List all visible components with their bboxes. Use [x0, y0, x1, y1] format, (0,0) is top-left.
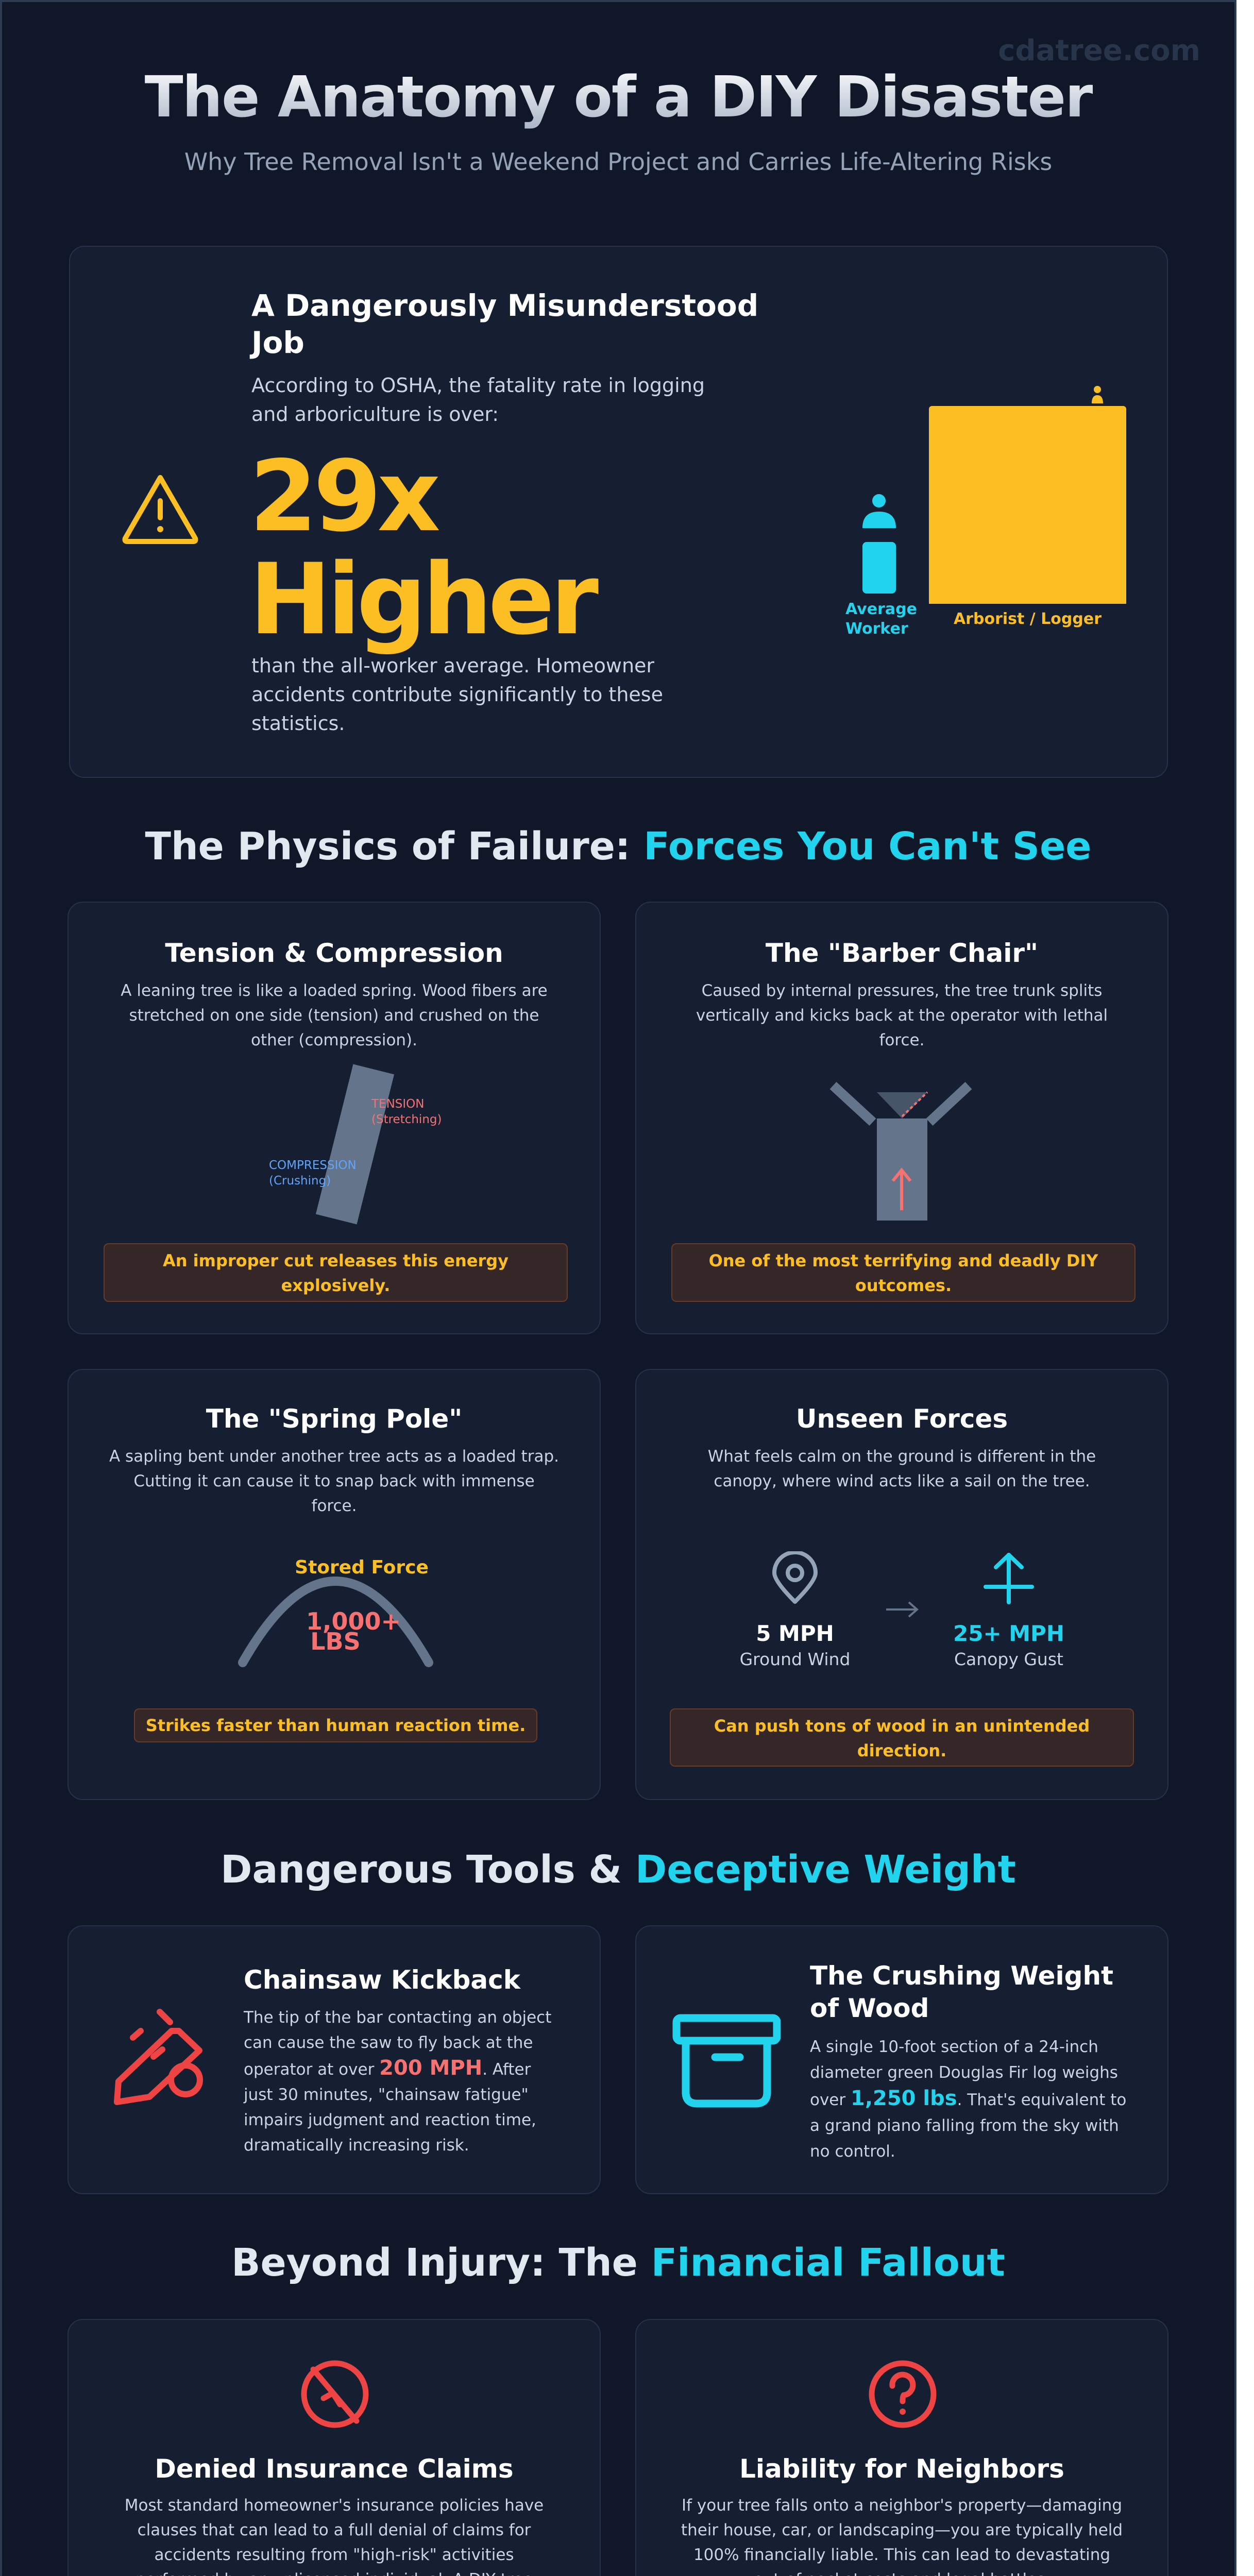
- stat: ground wind: Ground Wind: [740, 1649, 850, 1669]
- text: statistic explanation: statistics.: [251, 712, 345, 735]
- icon: small arborist figure: [1092, 386, 1103, 403]
- stat: 29x Higher: [249, 439, 599, 656]
- card text: A leaning tree is like a loaded spring. Wood fibers are: [121, 981, 548, 1000]
- card text: clauses that can lead to a full denial of claims for: [138, 2521, 531, 2539]
- stat: canopy gust: 25+ MPH: [953, 1621, 1064, 1646]
- card text: 100% financially liable. This can lead to devastating: [693, 2546, 1110, 2564]
- card text: [125, 2496, 544, 2576]
- card text: their house, car, or landscaping—you are typically held: [681, 2521, 1123, 2539]
- diagram: bent sapling arc: Stored Force: [295, 1557, 429, 1578]
- card text: operator at over 200 MPH. After: [244, 2056, 531, 2080]
- heading: dangerous tools: Dangerous Tools & Deceptive Weight: [221, 1848, 1016, 1892]
- card title: of Wood: [810, 1993, 929, 2023]
- card title: [810, 1961, 1113, 2023]
- stat: ground wind: [740, 1621, 850, 1669]
- diagram: leaning trunk: [269, 1064, 442, 1224]
- diagram: leaning trunk: COMPRESSION: [269, 1159, 357, 1172]
- card title: Denied Insurance Claims: [155, 2454, 514, 2484]
- heading: A Dangerously Misunderstood Job: [249, 288, 758, 360]
- card text: dramatically increasing risk.: [244, 2136, 469, 2155]
- card title: Liability for Neighbors: [739, 2454, 1064, 2484]
- watermark: top right: cdatree.com: [998, 34, 1200, 67]
- label: average worker: [845, 600, 917, 638]
- text: statistic explanation: [251, 654, 663, 735]
- label: arborist / logger: Arborist / Logger: [954, 610, 1102, 628]
- card text: [243, 2008, 551, 2155]
- bar chart: average vs arborist: [845, 386, 1126, 638]
- card title: The "Spring Pole": [206, 1404, 462, 1434]
- card text: Most standard homeowner's insurance policies have: [125, 2496, 544, 2515]
- card text: If your tree falls onto a neighbor's property—damaging: [682, 2496, 1122, 2515]
- card text: just 30 minutes, "chainsaw fatigue": [244, 2086, 529, 2104]
- heading: A Dangerously Misunderstood Job: A Dangerously Misunderstood: [251, 288, 758, 323]
- card title: Unseen Forces: [796, 1404, 1008, 1434]
- stat: 29x Higher: 29x: [249, 439, 436, 553]
- card title: The "Barber Chair": [766, 938, 1038, 968]
- icon: denied: [301, 2361, 369, 2428]
- card title: Chainsaw Kickback: [244, 1965, 520, 1995]
- callout: [671, 1243, 1136, 1302]
- stat: ground wind: 5 MPH: [756, 1621, 834, 1646]
- card text: force.: [879, 1031, 924, 1049]
- card text: What feels calm on the ground is different in the: [708, 1447, 1096, 1466]
- diagram: bent sapling arc: 1,000+: [306, 1607, 401, 1635]
- callout: [104, 1243, 568, 1302]
- diagram: bent sapling arc: [238, 1557, 433, 1667]
- panel: denied insurance: [67, 2319, 601, 2576]
- callout: [134, 1708, 537, 1742]
- card text: The tip of the bar contacting an object: [244, 2008, 551, 2027]
- icon: warning triangle: [123, 475, 198, 544]
- card text: accidents resulting from "high-risk" activities: [154, 2546, 514, 2564]
- card title: The Crushing Weight: [810, 1961, 1113, 1991]
- icon: box / log weight: [673, 2014, 781, 2107]
- card text: Cutting it can cause it to snap back with immense: [133, 1472, 535, 1490]
- title: The Anatomy of a DIY Disaster: [145, 64, 1092, 130]
- diagram: bent sapling arc: LBS: [310, 1628, 361, 1655]
- callout: direction.: [857, 1741, 946, 1760]
- card title: Tension & Compression: [165, 938, 503, 968]
- card text: stretched on one side (tension) and crushed on the: [129, 1006, 539, 1025]
- card text: no control.: [810, 2142, 895, 2161]
- diagram: leaning trunk: (Crushing): [269, 1174, 331, 1188]
- card text: [681, 2496, 1123, 2576]
- text: statistic explanation: accidents contribute significantly to these: [251, 683, 663, 706]
- card text: vertically and kicks back at the operator with lethal: [696, 1006, 1108, 1025]
- text: statistic explanation: than the all-worker average. Homeowner: [251, 654, 654, 677]
- icon: canopy gust: [984, 1553, 1034, 1604]
- stat: canopy gust: [953, 1621, 1064, 1669]
- text: OSHA intro: According to OSHA, the fatality rate in logging: [251, 374, 705, 397]
- card text: A sapling bent under another tree acts as a loaded trap.: [109, 1447, 559, 1466]
- diagram: leaning trunk: (Stretching): [371, 1113, 442, 1126]
- icon: chainsaw: [114, 2009, 203, 2105]
- panel: spring pole: [67, 1369, 601, 1800]
- callout: explosively.: [281, 1276, 390, 1295]
- panel: unseen forces: [635, 1369, 1168, 1800]
- card text: A single 10-foot section of a 24-inch: [810, 2038, 1098, 2056]
- text: OSHA intro: and arboriculture is over:: [251, 403, 499, 426]
- card text: force.: [312, 1497, 357, 1515]
- label: average worker: Average: [845, 600, 917, 618]
- card text: impairs judgment and reaction time,: [244, 2111, 536, 2129]
- card text: Caused by internal pressures, the tree trunk splits: [702, 981, 1102, 1000]
- card text: can cause the saw to fly back at the: [244, 2033, 533, 2052]
- panel: crushing weight: [635, 1925, 1168, 2194]
- panel: barber chair: [635, 902, 1168, 1334]
- callout: An improper cut releases this energy: [163, 1251, 509, 1270]
- arrow: [886, 1601, 919, 1618]
- callout: Strikes faster than human reaction time.: [146, 1716, 526, 1735]
- subtitle: Why Tree Removal Isn't a Weekend Project and Carries Life-Altering Risks: [184, 148, 1052, 176]
- callout: One of the most terrifying and deadly DIY: [709, 1251, 1098, 1270]
- panel: chainsaw kickback: [67, 1925, 601, 2194]
- card text: [109, 1447, 559, 1515]
- heading: physics of failure: The Physics of Failure: Forces You Can't See: [145, 824, 1091, 869]
- card text: canopy, where wind acts like a sail on the tree.: [714, 1472, 1090, 1490]
- card text: diameter green Douglas Fir log weighs: [810, 2063, 1118, 2082]
- stat: canopy gust: Canopy Gust: [954, 1649, 1063, 1669]
- callout: Can push tons of wood in an unintended: [714, 1716, 1090, 1736]
- card text: a grand piano falling from the sky with: [810, 2116, 1119, 2135]
- bar: arborist / logger: [929, 406, 1126, 604]
- card text: other (compression).: [251, 1031, 417, 1049]
- card text: over 1,250 lbs. That's equivalent to: [810, 2087, 1126, 2110]
- panel: tension & compression: [67, 902, 601, 1334]
- card text: [708, 1447, 1096, 1490]
- callout: outcomes.: [855, 1276, 952, 1295]
- icon: question circle: [869, 2361, 937, 2428]
- diagram: split trunk: [829, 1082, 972, 1221]
- panel: liability for neighbors: [635, 2319, 1168, 2576]
- icon: location pin: [772, 1551, 818, 1604]
- diagram: leaning trunk: TENSION: [371, 1097, 424, 1111]
- label: average worker: Worker: [845, 620, 908, 638]
- card text: [810, 2038, 1126, 2161]
- stat: 29x Higher: Higher: [249, 543, 595, 656]
- card text: [121, 981, 548, 1049]
- text: OSHA intro: [251, 374, 705, 426]
- callout: [670, 1708, 1134, 1767]
- heading: financial fallout: Beyond Injury: The Financial Fallout: [231, 2241, 1005, 2285]
- panel: fatality statistic: [69, 246, 1168, 778]
- icon: average worker figure: [862, 494, 896, 594]
- card text: [696, 981, 1108, 1049]
- heading: A Dangerously Misunderstood Job: Job: [251, 325, 304, 360]
